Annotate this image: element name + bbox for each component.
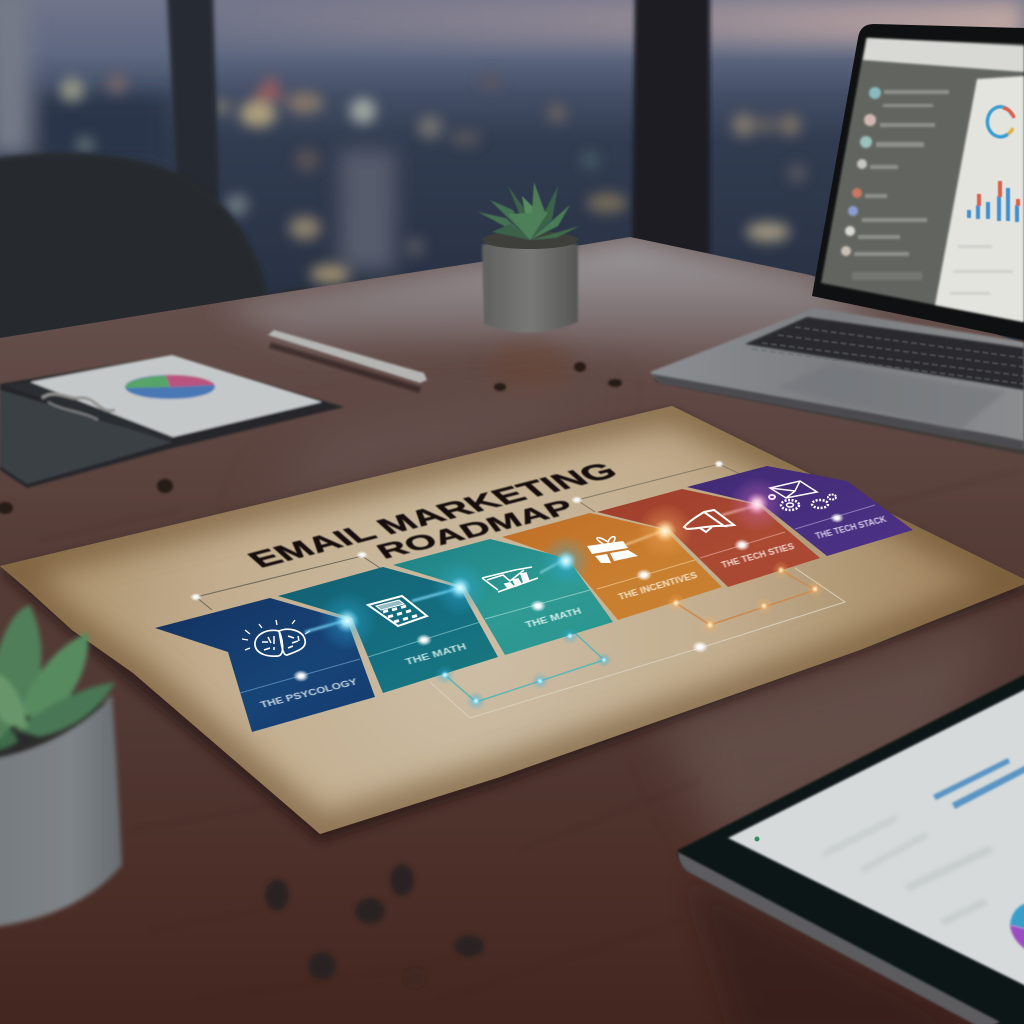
tablet [678,672,1024,1024]
step 5: the tech stacks [597,489,820,587]
laptop [650,24,1024,456]
label: the tech stacks: THE TECH STIES [720,542,796,571]
laptop keyboard keys [752,327,1024,384]
clipboard with pie chart sheet [0,355,344,488]
icon: calculator [368,596,427,626]
title: email marketing roadmap: EMAIL MARKETING [241,458,625,572]
pen on desk [268,330,427,390]
laptop donut chart [987,107,1014,137]
window pillars [167,0,710,255]
icon: bar chart with arrow [482,567,538,592]
centre potted succulent [478,182,580,333]
step 3: the math [393,539,613,655]
icon: gift box [587,537,638,563]
foreground potted plant [0,605,122,927]
kraft paper sheet [0,406,1024,834]
label: the psychology: THE PSYCOLOGY [259,677,359,711]
laptop bar chart [967,181,1020,222]
laptop sidebar list [841,87,949,280]
icon: envelope and gears [769,481,836,510]
step 1: the psychology [155,598,375,732]
label: the math: THE MATH [404,642,468,668]
desk surface [0,237,1024,1024]
step 6: the tech stack [687,466,913,556]
step 4: the incentives [502,513,722,620]
tablet blurred text lines [822,815,993,926]
title: email marketing roadmap [241,458,625,572]
office chair [0,153,310,350]
coffee beans scattered [0,362,622,514]
desk sheen and grain [40,237,1020,1000]
icon: brain [242,620,310,656]
title: email marketing roadmap: ROADMAP [371,495,579,563]
glowing nodes and light streaks [190,460,844,711]
roadmap chevrons [155,466,913,732]
foreground coffee beans [265,864,484,988]
laptop report text [950,245,1013,295]
label: the incentives: THE INCENTIVES [617,571,699,602]
step 2: the math [278,567,498,693]
paper sheet shadow [0,410,1024,842]
window with blurred city view at dusk [0,0,1024,340]
label: the math: THE MATH [524,606,583,631]
icon: megaphone [684,510,734,532]
connector lines on paper [196,464,845,718]
label: the tech stack: THE TECH STACK [814,515,889,542]
